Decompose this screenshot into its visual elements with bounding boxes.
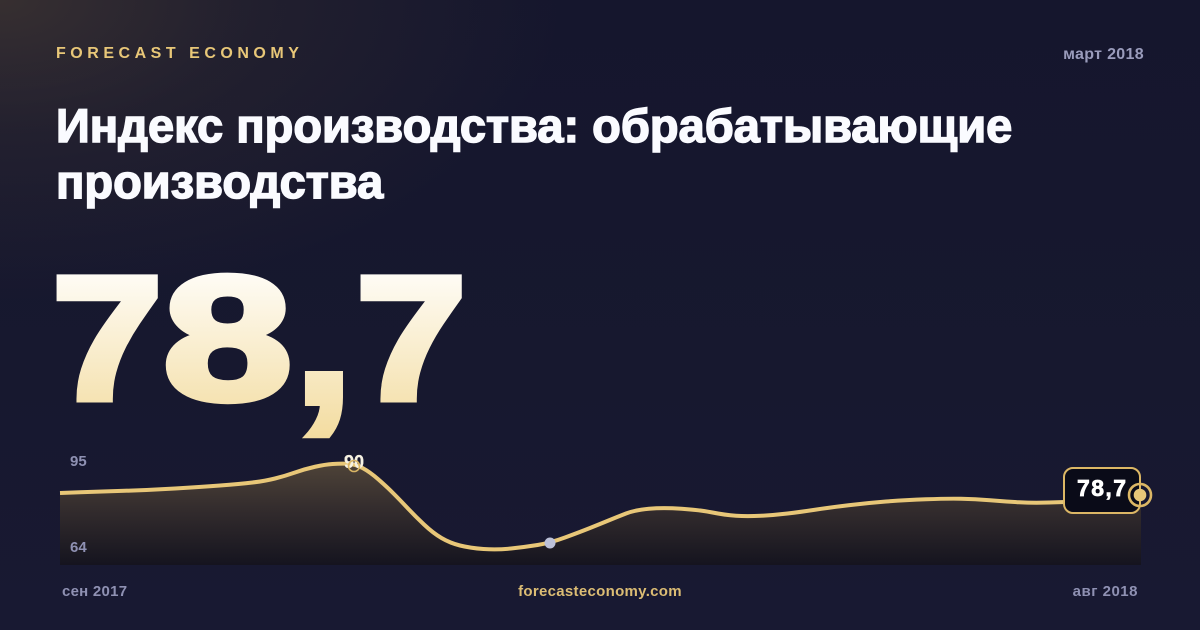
sparkline chart xyxy=(60,452,1152,565)
title xyxy=(56,99,1012,209)
axis end label: авг 2018 xyxy=(1073,583,1138,600)
peak marker xyxy=(348,460,360,472)
current value callout: 78,7 xyxy=(1077,475,1126,501)
current marker xyxy=(1129,484,1151,506)
date label: март 2018 xyxy=(1063,46,1144,63)
title: Индекс производства: обрабатывающие xyxy=(56,99,1012,152)
title: производства xyxy=(56,155,383,208)
big value xyxy=(52,230,467,449)
current value callout xyxy=(1064,468,1140,513)
big value: 7 xyxy=(356,240,467,436)
axis min: 64 xyxy=(70,539,87,556)
brand label: FORECAST ECONOMY xyxy=(56,45,303,62)
source link: forecasteconomy.com xyxy=(518,583,682,600)
big value: 8 xyxy=(163,239,292,437)
big value: 7 xyxy=(52,240,163,436)
axis max: 95 xyxy=(70,453,87,470)
trend line xyxy=(60,464,1065,549)
axis start label: сен 2017 xyxy=(62,583,127,600)
area fill xyxy=(60,464,1141,565)
peak label: 90 xyxy=(344,452,364,472)
low marker xyxy=(544,538,556,548)
